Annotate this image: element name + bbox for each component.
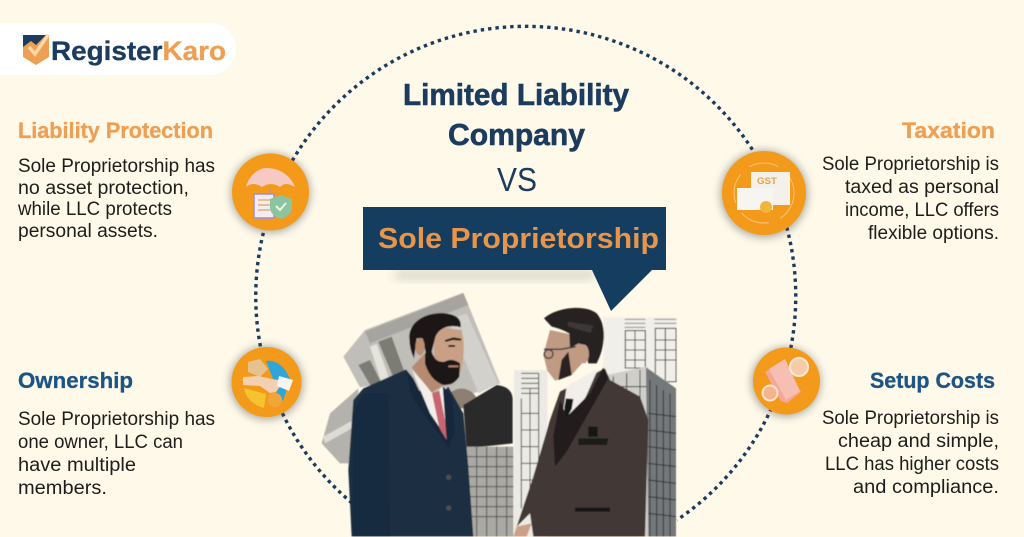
text block: ownership [18,409,215,499]
icon: logo shield [23,35,49,65]
title: Limited Liability [403,77,630,112]
man on right [513,308,648,537]
text block: setup costs [822,408,999,498]
speech bubble shadow [395,272,595,278]
panel: liability protection [17,118,215,242]
text block: taxation: income, LLC offers [845,200,999,221]
panel: ownership [18,368,215,499]
panel: taxation [822,118,999,244]
heading: ownership: Ownership [18,368,133,393]
text block: ownership: Sole Proprietorship has [18,409,215,430]
text block: setup costs: and compliance. [853,477,999,498]
building grid lower centre [467,447,513,537]
text block: liability protection [17,156,215,242]
text block: ownership: members. [18,478,107,499]
speech bubble: Sole Proprietorship: Sole Proprietorship [378,223,659,255]
photo: two businessmen with money and buildings [322,293,677,537]
panel: setup costs [822,368,999,498]
vs label: VS [497,161,537,198]
text block: liability protection: Sole Proprietorship has [18,156,215,177]
logo wordmark: RegisterKaro [51,36,226,66]
text block: setup costs: cheap and simple, [838,431,999,452]
icon: GST document: GST [757,176,778,186]
text block: taxation: flexible options. [868,223,999,244]
man on left [348,313,473,537]
dark building [463,385,513,448]
text block: taxation [822,154,999,244]
speech bubble: Sole Proprietorship [363,207,666,311]
banknotes collage [322,293,500,463]
logo [0,23,236,75]
title: Company [448,117,586,152]
text block: taxation: taxed as personal [845,177,999,198]
icon: GST document [720,150,808,238]
text block: ownership: have multiple [18,455,136,476]
text block: setup costs: LLC has higher costs [825,454,999,475]
building tall centre [514,370,547,537]
text block: taxation: Sole Proprietorship is [822,154,999,175]
title [403,77,630,152]
icon: cash and coins [751,347,821,417]
heading: setup costs: Setup Costs [870,368,995,393]
heading: liability protection: Liability Protection [18,118,213,143]
buildings on right [603,317,677,537]
dotted circle [256,26,796,520]
text block: liability protection: no asset protection, [18,178,189,199]
text block: ownership: one owner, LLC can [18,432,183,453]
heading: taxation: Taxation [902,118,995,143]
icon: umbrella shield [230,153,310,233]
icon: handshake [230,346,304,420]
text block: liability protection: personal assets. [18,221,158,242]
text block: liability protection: while LLC protects [17,199,172,220]
text block: setup costs: Sole Proprietorship is [822,408,999,429]
